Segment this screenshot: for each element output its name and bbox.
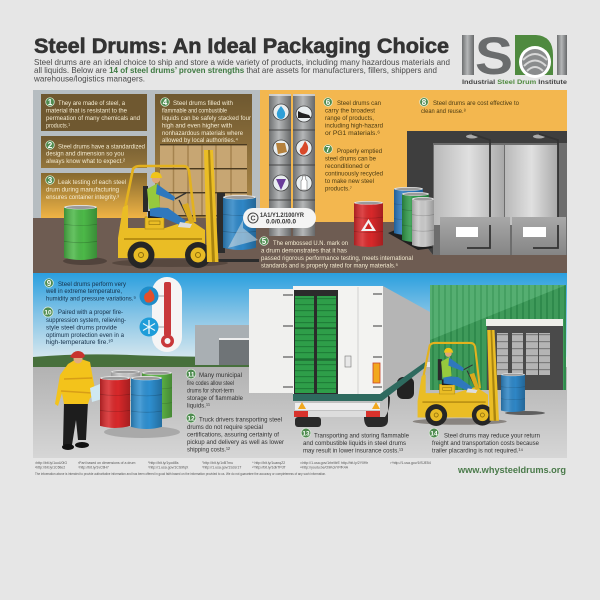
cleaning bays <box>407 131 567 255</box>
text 11: Many municipal <box>199 372 242 379</box>
text box 3 <box>41 173 147 218</box>
text 7: continuously recycled <box>325 171 383 178</box>
text box 1 <box>41 94 147 131</box>
footnotes: ¹¹http://1.usa.gov/1rbrMrE http://bit.ly/2Y0f9r <box>300 461 369 465</box>
icon: water drop <box>273 104 289 120</box>
text 13: and combustible liquids in steel drums <box>303 440 407 447</box>
trailer body <box>293 286 383 394</box>
footnotes: ³Part based on dimensions of a drum <box>78 461 135 465</box>
text 5 <box>261 240 413 270</box>
text 10: Paired with a proper fire- <box>58 309 123 316</box>
badge 14: 14 <box>430 430 438 438</box>
text 7: reconditioned or <box>325 163 371 170</box>
text box 4: Steel drums filled with <box>173 100 233 107</box>
badge 5 <box>260 237 268 246</box>
text box 3: ensures container integrity.³ <box>46 194 120 201</box>
trailer side perspective <box>383 286 430 394</box>
text box 2: design and dimension so you <box>46 151 124 158</box>
text 11: storage of flammable <box>187 395 243 402</box>
icon: bottle <box>296 175 312 191</box>
text 12: drums do not require special <box>187 424 263 431</box>
text 9: humidity and pressure variations.⁹ <box>46 296 136 303</box>
UN mark label: C <box>250 216 256 222</box>
text 10: style steel drums provide <box>46 325 117 332</box>
trailer chassis <box>293 362 427 401</box>
title: Steel Drums: An Ideal Packaging Choice <box>34 35 449 58</box>
grass <box>33 354 250 367</box>
footnotes: ²http://bit.ly/1C6tle2 <box>35 466 65 470</box>
text 12 <box>187 417 285 454</box>
background building <box>195 325 249 365</box>
intro text: Steel drums are an ideal choice to ship and store a wide variety of products, including many hazardous materials and <box>34 57 450 67</box>
text 5: a drum demonstrates that it has <box>261 248 348 255</box>
warehouse floor <box>33 218 567 273</box>
icon: shoe <box>296 106 312 122</box>
text box 4 <box>155 94 252 218</box>
footnotes: ⁴http://bit.ly/1vCtlH7 <box>78 466 109 470</box>
panel: top storage section <box>33 90 567 273</box>
ground <box>33 367 567 458</box>
footnotes: ¹²http://youtu.be/O9KckYFfK4A <box>300 466 349 470</box>
badge 7 <box>324 145 332 154</box>
text 12: pickup and delivery as well as lower <box>187 439 285 446</box>
website url: www.whysteeldrums.org <box>457 465 566 476</box>
tires <box>295 395 390 427</box>
text 7: Properly emptied <box>337 148 382 155</box>
badge 13 <box>301 428 311 438</box>
text box 4: high and even higher with <box>162 123 232 130</box>
text box 4: allowed by local authorities.⁴ <box>162 137 238 144</box>
badge 6 <box>324 98 332 107</box>
text 14: Steel drums may reduce your return <box>444 433 540 440</box>
badge 13: 13 <box>302 430 310 438</box>
forklift <box>112 150 228 268</box>
sky <box>33 273 567 357</box>
text 10: optimum protection even in a <box>46 332 124 339</box>
pipes <box>467 134 558 248</box>
text 8 <box>421 100 519 115</box>
drums group <box>100 370 180 438</box>
badge 14 <box>429 428 439 438</box>
text 12: shipping costs.¹² <box>187 447 231 454</box>
text 11: liquids.¹¹ <box>187 403 211 410</box>
badge 2 <box>46 141 54 150</box>
text 6: range of products, <box>325 115 374 122</box>
text box 4: flammable and combustible <box>162 108 227 115</box>
text 9: well in extreme temperature, <box>45 288 122 295</box>
text 5: standards and is properly rated for many materials.⁵ <box>261 263 398 270</box>
footnotes: ⁵http://bit.ly/1yodl8s <box>148 461 179 465</box>
icon: flame <box>296 140 312 156</box>
badge 11: 11 <box>188 372 195 378</box>
text 10: suppression system, relieving- <box>46 317 126 324</box>
badge 1: 1 <box>48 98 53 107</box>
UN mark label: 1A1/Y1.2/100/YR <box>260 213 305 219</box>
lamps <box>466 134 545 138</box>
intro text: warehouse/logistics managers. <box>33 74 145 84</box>
text 13 <box>303 433 409 454</box>
text box 2 <box>41 136 147 168</box>
text 10: high-temperature fire.¹⁰ <box>46 338 113 346</box>
text 5: passed rigorous performance testing, meets international <box>261 255 413 262</box>
badge 3 <box>46 176 54 185</box>
text box 2: Steel drums have a standardized <box>58 144 145 150</box>
footnotes: ⁶http://1.usa.gov/1CS9fqX <box>148 466 189 470</box>
text 9 <box>45 281 136 303</box>
badge 8 <box>420 98 428 107</box>
text 6: Steel drums can <box>337 100 381 107</box>
text box 1: They are made of steel, a <box>58 100 125 107</box>
footnotes: ⁷http://bit.ly/1xB7mu <box>202 461 233 465</box>
badge 4: 4 <box>163 98 168 107</box>
forklift at warehouse <box>413 330 507 426</box>
badge 5: 5 <box>262 237 267 246</box>
badge 1 <box>46 98 54 107</box>
footnotes: ¹⁰http://bit.ly/1dkTPdT <box>252 466 287 470</box>
text box 1: permeation of many chemicals and <box>46 115 140 122</box>
icon: grapes <box>273 175 289 191</box>
text 12: certifications, assuring certainty of <box>187 432 279 439</box>
badge 8: 8 <box>422 98 427 107</box>
text 8: Steel drums are cost effective to <box>433 100 519 107</box>
red drum <box>354 201 383 247</box>
blue drum on forks <box>215 193 259 262</box>
logo: Industrial Steel Drum Institute: S <box>475 27 513 86</box>
text 6 <box>325 100 383 137</box>
badge 10 <box>43 307 53 317</box>
pallet of stacked drums <box>160 144 247 216</box>
badge 3: 3 <box>48 176 53 185</box>
badge 11 <box>186 369 196 379</box>
text 7: steel drums can be <box>325 156 376 163</box>
text box 1: products.¹ <box>46 123 71 130</box>
text box 3: drum during manufacturing <box>46 187 119 194</box>
firefighter <box>55 351 102 450</box>
text box 4: nonhazardous materials where <box>162 130 243 137</box>
logo: Industrial Steel Drum Institute <box>462 27 567 86</box>
text 6: including high-hazard <box>325 123 383 130</box>
badge 10: 10 <box>44 310 52 316</box>
text 6: or PG1 materials.⁶ <box>325 130 380 137</box>
intro text <box>33 57 450 84</box>
warehouse building <box>430 285 566 390</box>
rear wheel <box>397 377 414 399</box>
badge 12: 12 <box>187 416 195 422</box>
badge 2: 2 <box>48 141 53 150</box>
blue drum at warehouse <box>501 373 545 415</box>
icon: snowflake <box>140 318 158 336</box>
text 5: The embossed U.N. mark on <box>273 240 348 247</box>
badge 7: 7 <box>326 145 331 154</box>
drum stacks <box>269 94 315 236</box>
footnotes: ¹http://bit.ly/1uoU0IG <box>35 461 67 465</box>
text 11: fire codes allow steel <box>187 380 234 387</box>
tanks <box>440 217 566 255</box>
text box 2: always know what to expect.² <box>46 158 126 165</box>
panel background <box>33 90 567 273</box>
icon: box <box>273 140 289 156</box>
text 11 <box>187 372 243 410</box>
bumper and lights <box>294 402 380 417</box>
badge 9 <box>45 279 53 288</box>
badge 4 <box>161 98 169 107</box>
text 12: Truck drivers transporting steel <box>199 417 282 424</box>
truck trailer <box>249 286 430 427</box>
text 8: clean and reuse.⁸ <box>421 108 466 115</box>
text 7 <box>325 148 383 193</box>
text 11: drums for short-term <box>187 388 234 395</box>
footnotes: ¹⁴http://1.usa.gov/1fSJE54 <box>390 461 431 465</box>
drums on pallet <box>388 187 434 250</box>
badge 12 <box>186 413 196 423</box>
icon: flame <box>140 286 158 306</box>
door hardware <box>283 294 382 387</box>
UN mark label <box>243 208 316 228</box>
stored drums <box>497 333 550 375</box>
text 14: trailer placarding is not required.¹⁴ <box>432 448 523 454</box>
footnotes: The information above is intended to provide authoritative information and has been offered in good faith based on the information provided to us. We do not guarantee the accuracy or completeness of any such information. <box>35 472 326 476</box>
text 7: to make new steel <box>325 178 374 185</box>
text 14 <box>432 433 540 454</box>
text box 3: Leak testing of each steel <box>58 179 126 186</box>
stacked gray drums with product icons <box>269 94 315 236</box>
text 9: Steel drums perform very <box>58 281 127 288</box>
orange wall <box>260 90 567 225</box>
trailer door panel <box>249 289 293 393</box>
UN mark label: 0.0/0.0/0.0 <box>266 220 297 226</box>
UN mark beam <box>228 220 258 248</box>
footnotes <box>35 461 431 476</box>
text box 4: liquids can be safely stacked four <box>162 115 252 122</box>
badge 9: 9 <box>47 279 52 288</box>
text 13: may result in lower insurance costs.¹³ <box>303 448 404 454</box>
text 14: freight and transportation costs because <box>432 440 539 447</box>
thermometer <box>152 277 182 352</box>
green drum <box>63 205 107 265</box>
footnotes: ⁹ http://bit.ly/1uanqZ2 <box>252 461 285 465</box>
bay walls <box>407 131 567 255</box>
text 10 <box>46 309 126 346</box>
text box 1: material that is resistant to the <box>46 108 127 115</box>
intro text: all liquids. Below are 14 of steel drums’ proven strengths that are assets for manufacturers, fillers, shippers and <box>34 65 437 75</box>
badge 6: 6 <box>326 98 331 107</box>
logo: Industrial Steel Drum Institute: Industrial Steel Drum Institute <box>462 79 567 86</box>
text 6: carry the broadest <box>325 108 375 115</box>
panel: bottom transport section <box>33 273 567 458</box>
green drums in trailer <box>294 290 338 394</box>
text 7: products.⁷ <box>325 186 353 193</box>
footnotes: ⁸http://1.usa.gov/1SJsr1T <box>202 466 242 470</box>
text 13: Transporting and storing flammable <box>314 433 409 440</box>
